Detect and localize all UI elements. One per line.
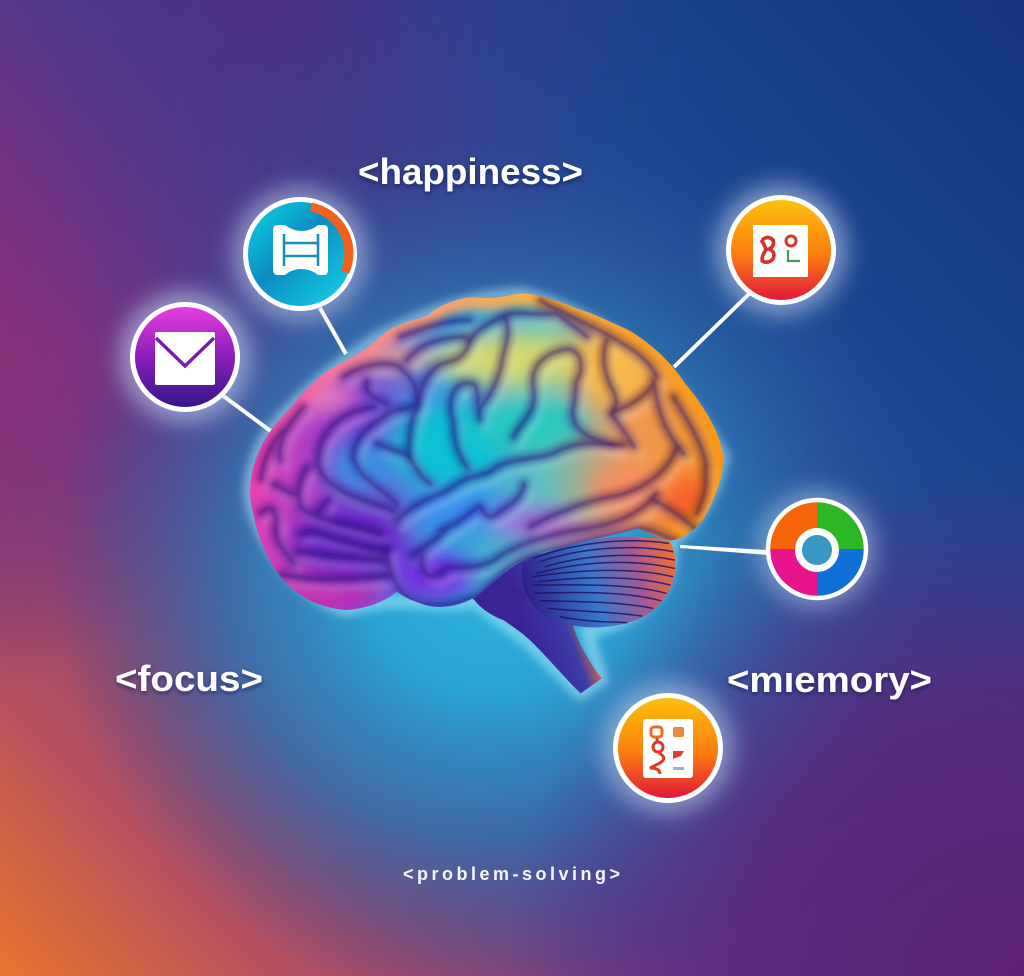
- gyri shading: [266, 307, 713, 613]
- lower cerebellar lobe: [473, 577, 527, 624]
- connector: orange icon to brain: [674, 294, 749, 367]
- connector: envelope to brain: [222, 395, 272, 432]
- icon: orange checklist card: [602, 682, 734, 814]
- label: focus: <focus>: [115, 658, 263, 699]
- brain rim colour: [250, 293, 723, 541]
- icon: teal ladder: [232, 186, 368, 322]
- label: problem-solving: <problem-solving>: [403, 864, 620, 884]
- label: memory: <mıemory>: [727, 659, 932, 700]
- cerebellum: [522, 537, 675, 627]
- connector: teal icon to brain: [320, 308, 346, 354]
- brain glow: [250, 293, 723, 693]
- brain: [240, 280, 730, 693]
- icon: orange calendar card: [715, 184, 847, 316]
- brain stem: [470, 547, 602, 693]
- cerebrum: [240, 280, 730, 617]
- icon: envelope: [119, 291, 251, 423]
- icon: colour wheel: [757, 489, 877, 609]
- connector: donut icon to brain: [680, 545, 768, 555]
- label: happiness: <happiness>: [358, 151, 583, 192]
